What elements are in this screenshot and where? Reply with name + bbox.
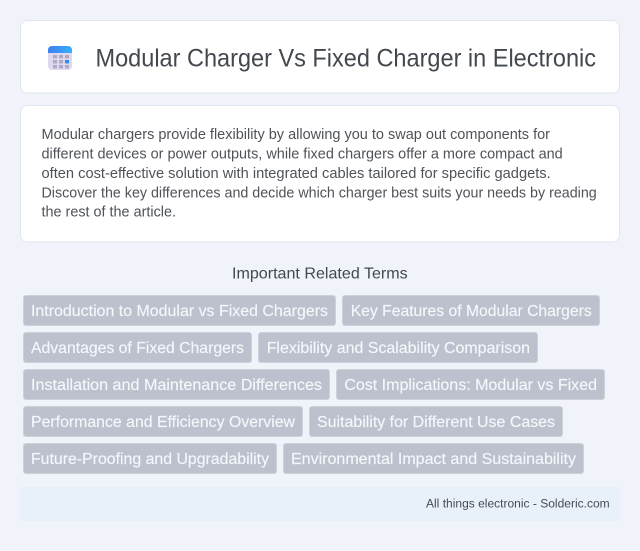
panel: introduction	[20, 106, 620, 242]
panel: title card	[20, 20, 620, 93]
tag: future-proofing	[24, 444, 276, 474]
tag: flexibility: Flexibility and Scalability Comparison	[267, 340, 530, 357]
tag: suitability	[310, 406, 562, 436]
tag: future-proofing: Future-Proofing and Upgradability	[31, 451, 269, 468]
text block: introduction paragraph: Modular chargers provide flexibility by allowing you to swap out components for	[42, 127, 550, 143]
text block: introduction paragraph: different devices or power outputs, while fixed chargers offer a more compact and	[42, 146, 563, 162]
tag: suitability: Suitability for Different Use Cases	[317, 414, 555, 431]
footer: All things electronic - Solderic.com	[426, 497, 610, 511]
tag: installation: Installation and Maintenance Differences	[31, 377, 322, 394]
tag: flexibility	[258, 332, 538, 362]
tag: performance	[24, 406, 302, 436]
icon: calendar	[48, 46, 72, 70]
footer	[20, 487, 620, 521]
tag: cost	[336, 370, 604, 400]
tag: cost: Cost Implications: Modular vs Fixed	[344, 377, 597, 394]
text block: introduction paragraph: Discover the key differences and decide which charger best suits your needs by reading	[42, 185, 597, 201]
tag: key features	[342, 296, 600, 326]
title: Modular Charger Vs Fixed Charger in Electronic	[96, 46, 596, 73]
heading: important related terms: Important Related Terms	[232, 265, 408, 282]
tag: advantages: Advantages of Fixed Chargers	[31, 340, 244, 357]
tag: environmental	[284, 444, 584, 474]
tag: key features: Key Features of Modular Chargers	[351, 303, 592, 320]
tag group: related terms	[24, 296, 604, 474]
tag: environmental: Environmental Impact and Sustainability	[291, 451, 576, 468]
text block: introduction paragraph: the rest of the article.	[42, 205, 176, 221]
tag: installation	[24, 370, 330, 400]
tag: performance: Performance and Efficiency Overview	[31, 414, 295, 431]
text block: introduction paragraph	[42, 127, 597, 221]
tag: advantages	[24, 332, 252, 362]
text block: introduction paragraph: often cost-effective solution with integrated cables tailored for specific gadgets.	[42, 166, 551, 182]
tag: introduction	[24, 296, 336, 326]
tag: introduction: Introduction to Modular vs Fixed Chargers	[31, 303, 328, 320]
